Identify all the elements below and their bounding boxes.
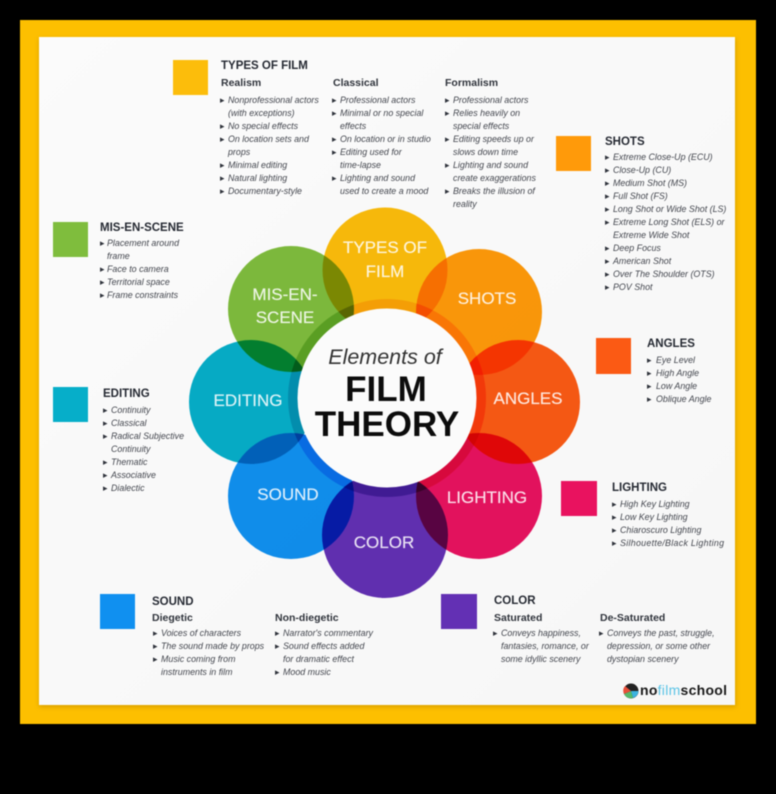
icon: yellow square <box>173 60 208 95</box>
list: mis-en-scene: frame <box>107 251 130 261</box>
column: classical <box>332 77 431 196</box>
column: non-diegetic: ▸ <box>275 667 280 677</box>
list: lighting: Low Key Lighting <box>620 512 688 522</box>
column: formalism: Relies heavily on <box>453 108 520 118</box>
column: non-diegetic: for dramatic effect <box>283 654 355 664</box>
list: shots: ▸ <box>605 282 610 292</box>
list: editing: ▸ <box>103 418 108 428</box>
column: diegetic: Voices of characters <box>161 628 242 638</box>
list: lighting: Chiaroscuro Lighting <box>620 525 701 535</box>
petal labels: SHOTS <box>458 289 516 308</box>
column: de-saturated: Conveys the past, struggle, <box>607 628 715 638</box>
column: realism: Nonprofessional actors <box>228 95 319 105</box>
column: formalism: Breaks the illusion of <box>453 186 536 196</box>
logo: nofilmschool: nofilmschool <box>640 682 727 698</box>
list: editing <box>103 405 184 493</box>
icon: teal square <box>53 387 88 422</box>
column: de-saturated <box>599 612 715 664</box>
list: shots: ▸ <box>605 191 610 201</box>
list: shots: ▸ <box>605 204 610 214</box>
list: mis-en-scene: ▸ <box>100 264 105 274</box>
column: formalism: create exaggerations <box>453 173 536 183</box>
list: shots: ▸ <box>605 165 610 175</box>
centre title <box>315 345 459 444</box>
petal: mis-en-scene <box>228 246 354 372</box>
heading: color: COLOR <box>494 595 536 607</box>
column: classical: Minimal or no special <box>340 108 424 118</box>
petal labels: SOUND <box>257 485 319 504</box>
list: shots: ▸ <box>605 256 610 266</box>
column: realism: ▸ <box>220 121 225 131</box>
list: lighting: High Key Lighting <box>620 499 690 509</box>
column: formalism: ▸ <box>445 160 450 170</box>
list: lighting: ▸ <box>612 538 617 548</box>
heading: mis-en-scene: MIS-EN-SCENE <box>100 222 184 234</box>
column: formalism: ▸ <box>445 108 450 118</box>
list: lighting <box>612 499 724 548</box>
list: shots: Full Shot (FS) <box>613 191 668 201</box>
column: formalism: Editing speeds up or <box>453 134 535 144</box>
list: editing: Thematic <box>111 457 148 467</box>
column: diegetic: ▸ <box>153 628 158 638</box>
icon: green square <box>53 222 88 257</box>
list: editing: Dialectic <box>111 483 145 493</box>
petal: lighting <box>416 433 542 559</box>
column: formalism: ▸ <box>445 95 450 105</box>
column: de-saturated: ▸ <box>599 628 604 638</box>
petal: color <box>322 472 448 598</box>
column: formalism: reality <box>453 199 477 209</box>
column: saturated <box>493 612 590 664</box>
column: classical: ▸ <box>332 108 337 118</box>
icon: blue square <box>100 594 135 629</box>
column: non-diegetic: Mood music <box>283 667 331 677</box>
column: diegetic: ▸ <box>153 641 158 651</box>
column: non-diegetic: Sound effects added <box>283 641 365 651</box>
list: shots: Deep Focus <box>613 243 661 253</box>
column: classical: ▸ <box>332 95 337 105</box>
list: editing: ▸ <box>103 457 108 467</box>
column: realism: ▸ <box>220 95 225 105</box>
column: non-diegetic: Narrator's commentary <box>283 628 374 638</box>
list: angles: ▸ <box>647 394 652 404</box>
heading: lighting: LIGHTING <box>612 482 667 494</box>
petal labels: ANGLES <box>494 389 562 408</box>
column: classical: Professional actors <box>340 95 416 105</box>
column: classical: time-lapse <box>340 160 381 170</box>
column: diegetic: Music coming from <box>161 654 235 664</box>
list: shots: Extreme Long Shot (ELS) or <box>613 217 726 227</box>
column: realism: ▸ <box>220 134 225 144</box>
list: lighting: ▸ <box>612 499 617 509</box>
column: realism: ▸ <box>220 160 225 170</box>
column: de-saturated: De-Saturated <box>600 612 665 624</box>
list: angles: ▸ <box>647 355 652 365</box>
list: angles: Eye Level <box>656 355 696 365</box>
heading: sound: SOUND <box>152 596 194 608</box>
list: shots: Long Shot or Wide Shot (LS) <box>613 204 726 214</box>
list: mis-en-scene: Frame constraints <box>107 290 179 300</box>
column: formalism: Lighting and sound <box>453 160 529 170</box>
list: angles <box>647 355 711 404</box>
card shadow <box>39 39 736 707</box>
panel: sound <box>100 594 374 677</box>
centre title: FILM <box>345 370 427 409</box>
column: saturated: fantasies, romance, or <box>501 641 590 651</box>
list: editing: ▸ <box>103 405 108 415</box>
darker ring around the centre <box>288 298 486 498</box>
list: editing: ▸ <box>103 483 108 493</box>
list: mis-en-scene: ▸ <box>100 290 105 300</box>
column: classical: Lighting and sound <box>340 173 416 183</box>
column: formalism: Professional actors <box>453 95 529 105</box>
icon: orange-red square <box>596 338 631 374</box>
column: non-diegetic: ▸ <box>275 641 280 651</box>
column: classical: used to create a mood <box>340 186 429 196</box>
list: mis-en-scene <box>100 238 180 300</box>
list: shots: ▸ <box>605 178 610 188</box>
list: mis-en-scene: ▸ <box>100 277 105 287</box>
column: classical: effects <box>340 121 367 131</box>
column: classical: ▸ <box>332 134 337 144</box>
list: angles: ▸ <box>647 381 652 391</box>
petal: angles <box>456 340 580 464</box>
heading: shots: SHOTS <box>605 136 645 148</box>
column: realism: Documentary-style <box>228 186 302 196</box>
list: editing: Associative <box>110 470 156 480</box>
list: editing: Continuity <box>111 444 151 454</box>
column: realism: (with exceptions) <box>228 108 295 118</box>
list: editing: ▸ <box>103 470 108 480</box>
column: realism: Realism <box>221 77 261 89</box>
column: realism <box>220 77 319 196</box>
column: non-diegetic <box>275 612 374 677</box>
panel: color <box>441 594 715 664</box>
list: editing: ▸ <box>103 431 108 441</box>
column: diegetic <box>152 612 265 677</box>
petal labels: MIS-EN- <box>252 285 318 304</box>
list: shots: ▸ <box>605 243 610 253</box>
list: angles: Low Angle <box>656 381 697 391</box>
list: angles: High Angle <box>656 368 699 378</box>
panel: shots <box>556 136 726 292</box>
list: editing: Classical <box>111 418 148 428</box>
centre title: Elements of <box>328 345 444 369</box>
list: shots: ▸ <box>605 269 610 279</box>
column: diegetic: ▸ <box>153 654 158 664</box>
heading: angles: ANGLES <box>647 338 695 350</box>
flower diagram <box>189 208 580 598</box>
petal labels <box>214 238 562 552</box>
column: formalism <box>445 77 536 209</box>
column: realism: Minimal editing <box>228 160 287 170</box>
column: classical: Classical <box>333 77 379 89</box>
column: realism: ▸ <box>220 173 225 183</box>
list: angles: Oblique Angle <box>656 394 711 404</box>
list: shots: ▸ <box>605 217 610 227</box>
petal labels: SCENE <box>256 308 314 327</box>
list: shots <box>605 152 726 292</box>
column: non-diegetic: ▸ <box>275 628 280 638</box>
list: editing: Continuity <box>111 405 151 415</box>
list: mis-en-scene: Territorial space <box>107 277 170 287</box>
column: realism: ▸ <box>220 186 225 196</box>
column: diegetic: The sound made by props <box>161 641 265 651</box>
column: saturated: Conveys happiness, <box>501 628 581 638</box>
column: de-saturated: depression, or some other <box>607 641 711 651</box>
list: shots: ▸ <box>605 152 610 162</box>
list: shots: Extreme Wide Shot <box>613 230 690 240</box>
list: shots: Medium Shot (MS) <box>613 178 687 188</box>
centre title: THEORY <box>315 405 459 444</box>
petal labels: FILM <box>366 262 404 281</box>
white card <box>39 37 735 705</box>
list: editing: Radical Subjective <box>111 431 184 441</box>
panel: lighting <box>561 481 724 548</box>
column: classical: On location or in studio <box>340 134 431 144</box>
list: shots: Extreme Close-Up (ECU) <box>613 152 713 162</box>
list: angles: ▸ <box>647 368 652 378</box>
list: shots: Close-Up (CU) <box>613 165 671 175</box>
list: shots: American Shot <box>612 256 672 266</box>
column: saturated: ▸ <box>493 628 498 638</box>
petal: types of film <box>322 208 448 332</box>
column: realism: Natural lighting <box>228 173 287 183</box>
panel: editing <box>53 387 184 493</box>
centre circle <box>298 308 476 488</box>
icon: purple square <box>441 594 477 629</box>
column: classical: Editing used for <box>340 147 403 157</box>
column: diegetic: instruments in film <box>161 667 233 677</box>
column: formalism: ▸ <box>445 186 450 196</box>
list: shots: Over The Shoulder (OTS) <box>613 269 715 279</box>
list: lighting: ▸ <box>612 525 617 535</box>
list: mis-en-scene: Placement around <box>107 238 180 248</box>
column: formalism: slows down time <box>453 147 518 157</box>
panel: types of film <box>173 60 536 209</box>
column: classical: ▸ <box>332 173 337 183</box>
petal: shots <box>416 249 542 375</box>
icon: orange square <box>556 136 591 171</box>
heading: types of film: TYPES OF FILM <box>221 60 308 72</box>
column: diegetic: Diegetic <box>152 612 193 624</box>
heading: editing: EDITING <box>103 388 150 400</box>
column: formalism: ▸ <box>445 134 450 144</box>
icon: pink square <box>561 481 597 516</box>
petal labels: EDITING <box>214 391 282 410</box>
list: shots: POV Shot <box>613 282 653 292</box>
petal: editing <box>189 340 313 464</box>
icon: logo disc <box>623 684 638 698</box>
column: classical: ▸ <box>332 147 337 157</box>
list: lighting: Silhouette/Black Lighting <box>620 538 724 548</box>
column: realism: No special effects <box>228 121 299 131</box>
list: lighting: ▸ <box>612 512 617 522</box>
column: realism: On location sets and <box>228 134 310 144</box>
column: realism: props <box>227 147 251 157</box>
column: saturated: Saturated <box>494 612 542 624</box>
petal labels: TYPES OF <box>343 238 427 257</box>
column: non-diegetic: Non-diegetic <box>275 612 339 624</box>
column: saturated: some idyllic scenery <box>501 654 581 664</box>
column: de-saturated: dystopian scenery <box>607 654 679 664</box>
column: formalism: Formalism <box>445 77 498 89</box>
panel: angles <box>596 338 711 404</box>
petal: sound <box>228 433 354 559</box>
list: mis-en-scene: Face to camera <box>107 264 169 274</box>
petal labels: COLOR <box>354 533 414 552</box>
panel: mis-en-scene <box>53 222 184 300</box>
column: formalism: special effects <box>453 121 510 131</box>
petal labels: LIGHTING <box>447 488 527 507</box>
list: mis-en-scene: ▸ <box>100 238 105 248</box>
